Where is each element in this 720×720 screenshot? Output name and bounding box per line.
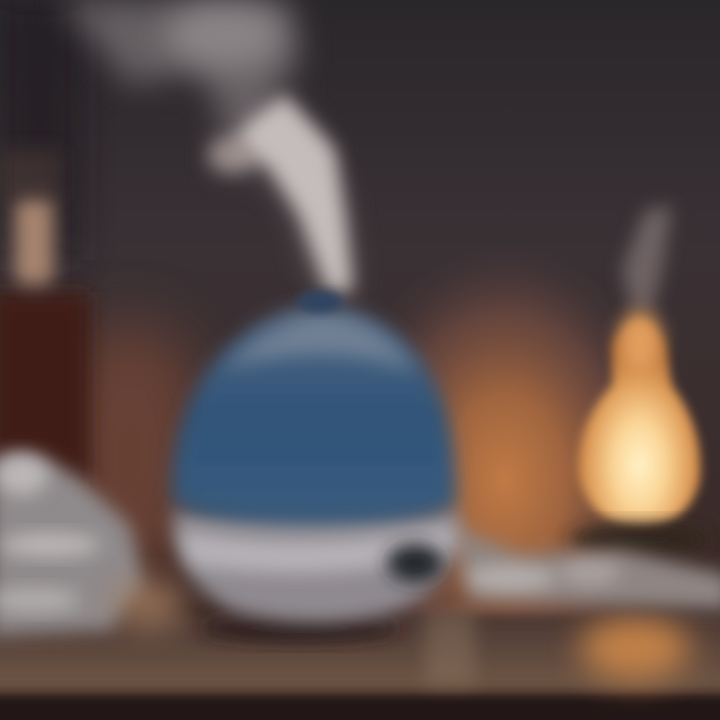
table surface	[0, 610, 720, 720]
humidifier dome	[172, 305, 456, 524]
humidifier base	[172, 510, 460, 623]
white band	[178, 525, 455, 573]
steam plume	[60, 0, 352, 292]
nozzle	[298, 291, 342, 313]
right cotton strip	[450, 525, 720, 610]
left bottle	[0, 150, 90, 482]
humidifier	[172, 291, 460, 642]
dome top highlight	[225, 318, 415, 372]
humidifier shadow	[200, 614, 400, 642]
front knob	[387, 544, 443, 582]
left towel pile	[0, 453, 186, 635]
right lamp	[570, 205, 710, 556]
